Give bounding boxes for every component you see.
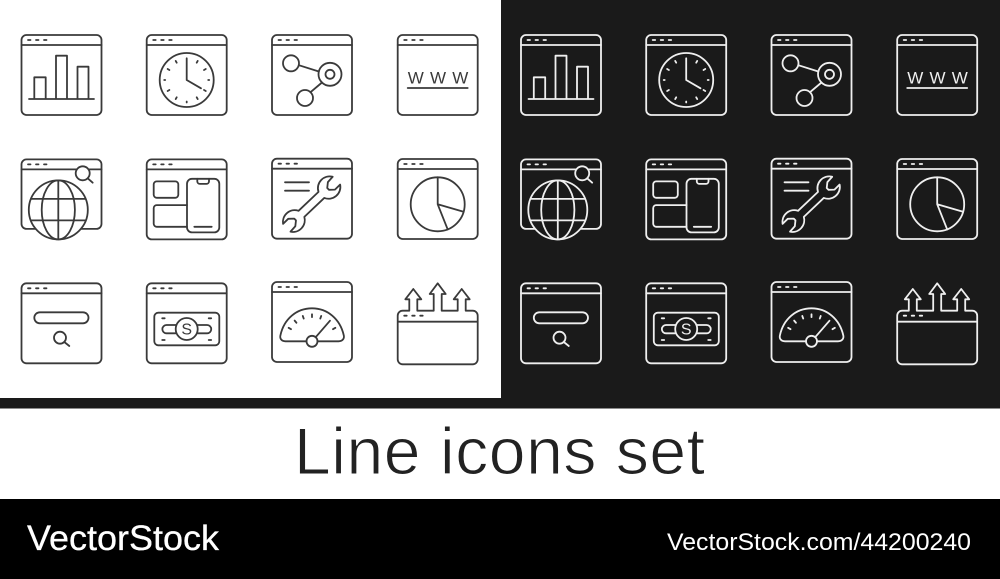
- icon: browser pie chart: [398, 159, 478, 239]
- icon: browser speedometer: [272, 282, 352, 362]
- icon: browser upload arrows, dark: [897, 283, 977, 364]
- icon: browser bar chart: [22, 35, 102, 115]
- icon: browser money: [147, 283, 227, 363]
- icon: browser money: S: [181, 322, 192, 339]
- icon: browser wrench: [272, 159, 352, 239]
- icon: browser clock, dark: [646, 35, 726, 115]
- icon: browser speedometer, dark: [772, 282, 852, 362]
- icon: browser upload arrows: [398, 283, 478, 364]
- icon: browser www, dark: WWW: [907, 68, 968, 87]
- icon: globe search, dark: [521, 159, 601, 239]
- icon: browser www: [398, 35, 478, 115]
- icon: browser search bar, dark: [521, 283, 601, 363]
- icon: browser money, dark: [646, 283, 726, 363]
- icon: browser phone layout, dark: [646, 159, 726, 239]
- icon: browser www, dark: [897, 35, 977, 115]
- icon: globe search: [22, 159, 102, 239]
- icon: browser clock: [147, 35, 227, 115]
- icon: browser bar chart, dark: [521, 35, 601, 115]
- footer bar: [0, 499, 1000, 579]
- panel: light icon grid: [22, 35, 478, 364]
- icon: browser phone layout: [147, 159, 227, 239]
- footer image id: VectorStock.com/44200240: [667, 529, 971, 556]
- strip under light panel: [0, 398, 501, 408]
- icon: browser search bar: [22, 283, 102, 363]
- icon: browser www: WWW: [408, 68, 468, 87]
- icon: browser wrench, dark: [772, 159, 852, 239]
- title: Line icons set: [294, 414, 705, 488]
- icon: browser pie chart, dark: [897, 159, 977, 239]
- panel: dark icon grid: [501, 0, 1000, 408]
- icon: browser share nodes, dark: [772, 35, 852, 115]
- icon: browser money, dark: S: [681, 322, 692, 339]
- footer logo text: VectorStock: [27, 519, 220, 558]
- dark panel background: [501, 0, 1000, 408]
- icon: browser share nodes: [272, 35, 352, 115]
